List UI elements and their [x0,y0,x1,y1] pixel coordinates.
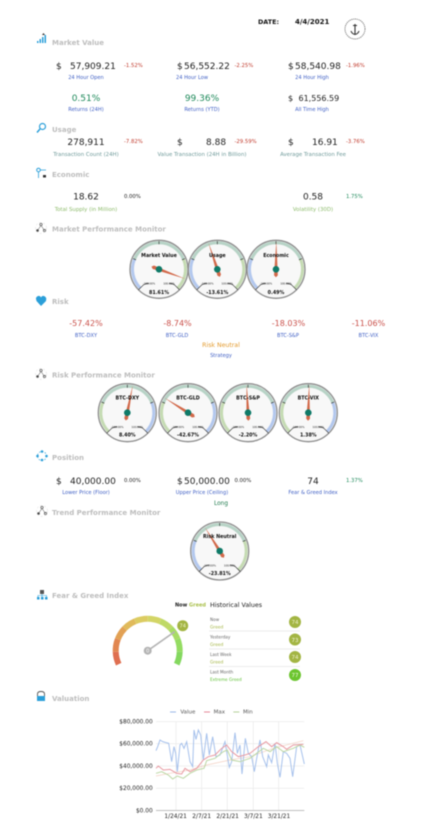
panel: position row: 0.00% [124,478,141,484]
panel: historical values: Last Week [210,652,232,657]
panel: market value row 1: $ [288,62,294,72]
gauge: BTC-DXY [98,384,156,442]
panel: position row: Upper Price (Ceiling) [176,490,228,496]
gauge: Economic: Economic [263,253,289,259]
gauge: Market Value: 100.00% [163,281,175,285]
chart: valuation line chart: 1/24/21 [164,814,187,820]
panel: historical values: Last Month [210,670,234,674]
panel: position row [56,477,363,496]
panel: market value row 2: Returns (YTD) [184,107,220,113]
gauge: BTC-VIX [279,384,337,442]
chart: valuation line chart: $80,000.00 [119,720,153,726]
panel: historical values: 77 [292,673,299,679]
panel: market value row 1: -2.25% [234,63,253,69]
panel: market value row 2: 99.36% [185,94,220,104]
gauge: Usage [188,240,246,298]
panel: market value row 2: $ [288,94,293,103]
gauge: BTC-GLD: 100.00% [192,425,204,429]
heading: Market Value [37,33,104,47]
panel: risk values: -11.06% [352,319,386,328]
panel: position row: Lower Price (Floor) [62,490,110,496]
panel: risk values: -8.74% [163,319,192,328]
chart: valuation line chart: 2/21/21 [216,814,239,820]
panel: market value row 1: 56,552.22 [184,62,230,72]
gauge: BTC-DXY: -100.00% [111,425,124,429]
gauge: BTC-GLD: BTC-GLD [176,396,200,402]
panel: market value row 2: 61,556.59 [298,94,339,103]
gauge: Risk Neutral: Risk Neutral [203,534,237,540]
gauge: BTC-DXY: 100.00% [132,425,144,429]
panel: position row: 50,000.00 [184,477,230,487]
panel: historical values: Greed [210,624,224,630]
chart legend: Value [180,710,196,716]
gauge: Economic [247,240,305,298]
position label: Long: Long [214,501,228,507]
panel: market value row 1: -1.52% [124,63,143,69]
panel: position row: Fear & Greed Index [288,490,338,496]
gauge: Usage: Usage [209,253,226,259]
chart: valuation line chart [119,710,304,820]
now label [175,602,206,608]
panel: market value row 1 [56,62,365,81]
gauge: Market Value: -100.00% [143,281,156,285]
panel: position row: $ [177,477,183,487]
panel: usage row: -7.82% [124,139,143,145]
strategy label [202,342,240,359]
panel: risk values: BTC-VIX [359,333,379,339]
heading: Economic [37,168,89,179]
panel: market value row 2: All Time High [295,107,329,113]
panel: usage row: -3.76% [346,139,365,145]
panel: historical values: 74 [292,655,299,661]
now label: Greed [189,602,206,608]
heading: Market Performance Monitor [36,222,166,234]
chart: valuation line chart: $0.00 [136,808,153,814]
strategy label: Risk Neutral [202,342,240,349]
gauge: BTC-S&P: BTC-S&P [236,396,260,402]
panel: market value row 1: 24 Hour Low [176,75,208,81]
panel: market value row 1: 24 Hour High [295,75,329,81]
panel: historical values: 73 [292,638,299,644]
gauge: Usage: -100.00% [201,281,214,285]
heading: Economic: Economic [52,171,89,179]
chart: valuation line chart: 3/7/21 [244,814,263,820]
panel: usage row: Transaction Count (24H) [52,152,119,158]
panel: market value row 1: 57,909.21 [70,62,116,72]
panel: position row: 74 [307,477,319,487]
gauge: BTC-S&P: -100.00% [232,425,245,429]
gauge: Risk Neutral [191,522,249,580]
heading: Fear & Greed Index: Fear & Greed Index [52,592,129,600]
panel: historical values: Historical Values [210,602,262,609]
heading: Trend Performance Monitor [36,506,161,517]
gauge: Market Value: 81.61% [149,290,169,296]
panel: usage row: 278,911 [67,138,105,148]
now label: Now [175,602,188,608]
panel: risk values: BTC-DXY [75,333,98,339]
panel: market value row 2 [68,94,339,113]
panel: historical values: Yesterday [209,634,231,640]
panel: economic row: 18.62 [73,192,99,202]
gauge: BTC-VIX: 1.38% [300,433,317,439]
gauge: BTC-S&P [219,384,277,442]
gauge: Economic: -100.00% [260,281,273,285]
panel: historical values: Greed [210,660,224,666]
panel: economic row [54,192,363,213]
panel: market value row 1: -1.96% [346,63,365,69]
chart: valuation line chart: $60,000.00 [119,742,153,748]
gauge: Usage: -13.61% [206,290,228,296]
heading: Trend Performance Monitor: Trend Performance Monitor [52,509,161,517]
panel: risk values [69,319,386,339]
gauge: Risk Neutral: -23.81% [209,571,231,577]
panel: risk values: -18.03% [272,319,306,328]
gauge: Market Value [130,240,188,298]
gauge: BTC-S&P: 100.00% [252,425,264,429]
heading: Position: Position [52,454,84,462]
gauge: Market Value: Market Value [141,253,178,259]
gauge: BTC-GLD [159,384,217,442]
date [258,18,329,26]
gauge: Economic: 0.49% [268,290,285,296]
heading: Usage [37,124,77,134]
panel: position row: 0.00% [234,478,251,484]
chart: valuation line chart: 3/21/21 [268,814,291,820]
date: DATE: [258,18,279,26]
panel: usage row: $ [288,138,294,148]
chart legend [170,710,253,716]
chart: fear and greed gauge [116,619,188,664]
gauge: BTC-DXY: 8.40% [119,433,136,439]
heading: Position [36,450,84,462]
panel: usage row [52,138,365,158]
panel: risk values: BTC-GLD [166,333,188,339]
panel: position row: 1.37% [346,478,363,484]
gauge: Usage: 100.00% [222,281,234,285]
gauge: BTC-GLD: -42.67% [177,433,199,439]
panel: usage row: 8.88 [206,138,226,148]
panel: market value row 1: $ [177,62,183,72]
chart: valuation line chart: $40,000.00 [119,764,153,770]
gauge: BTC-VIX: -100.00% [292,425,305,429]
panel: historical values: Greed [210,642,224,648]
panel: historical values: 74 [292,620,299,626]
heading: Valuation [37,692,89,703]
panel: economic row: Volatility (30D) [293,207,333,213]
chart legend: Max [214,710,226,716]
panel: economic row: 1.75% [346,194,363,200]
heading: Risk [36,296,69,306]
gauge: Risk Neutral: 100.00% [224,564,236,568]
gauge: BTC-VIX: BTC-VIX [298,396,319,402]
gauge: BTC-GLD: -100.00% [172,425,185,429]
heading: Market Value: Market Value [52,39,104,47]
panel: usage row: 16.91 [312,138,338,148]
panel: economic row: 0.58 [303,192,323,202]
panel: usage row: $ [177,138,183,148]
gauge: BTC-VIX: 100.00% [313,425,325,429]
panel: risk values: -57.42% [69,319,103,328]
panel: economic row: Total Supply (in Million) [54,207,117,213]
date: 4/4/2021 [295,18,329,26]
panel: risk values: BTC-S&P [277,333,299,339]
panel: usage row: -29.59% [234,139,257,145]
chart legend: Min [243,710,253,716]
panel: market value row 2: 0.51% [72,94,101,104]
heading: Risk: Risk [52,298,69,306]
strategy label: Strategy [210,353,232,359]
gauge: BTC-DXY: BTC-DXY [115,396,140,402]
panel: position row: 40,000.00 [70,477,116,487]
chart: fear and greed gauge: 0 [146,649,149,655]
gauge: BTC-S&P: -2.20% [239,433,258,439]
chart: fear and greed gauge: 74 [180,624,186,630]
panel: usage row: Average Transaction Fee [280,152,347,158]
panel: market value row 1: 58,540.98 [295,62,341,72]
panel: historical values: Extreme Greed [210,677,242,682]
panel: usage row: Value Transaction (24H in Billion) [158,152,246,158]
heading: Fear & Greed Index [37,590,129,600]
heading: Usage: Usage [52,126,77,134]
heading: Valuation: Valuation [52,695,89,703]
panel: market value row 2: Returns (24H) [68,107,104,113]
panel: position row: $ [56,477,62,487]
gauge: Economic: 100.00% [280,281,292,285]
icon: anchor logo [345,19,365,39]
heading: Risk Performance Monitor: Risk Performance Monitor [52,372,155,380]
heading: Risk Performance Monitor [36,368,155,380]
panel: market value row 1: $ [56,62,62,72]
panel: historical values: Now [210,617,220,622]
panel: historical values [209,602,301,682]
gauge: Risk Neutral: -100.00% [203,564,216,568]
chart: valuation line chart: 2/7/21 [192,814,211,820]
panel: market value row 1: 24 Hour Open [68,75,104,81]
panel: economic row: 0.00% [124,194,141,200]
heading: Market Performance Monitor: Market Performance Monitor [52,226,166,234]
chart: valuation line chart: $20,000.00 [119,786,153,792]
